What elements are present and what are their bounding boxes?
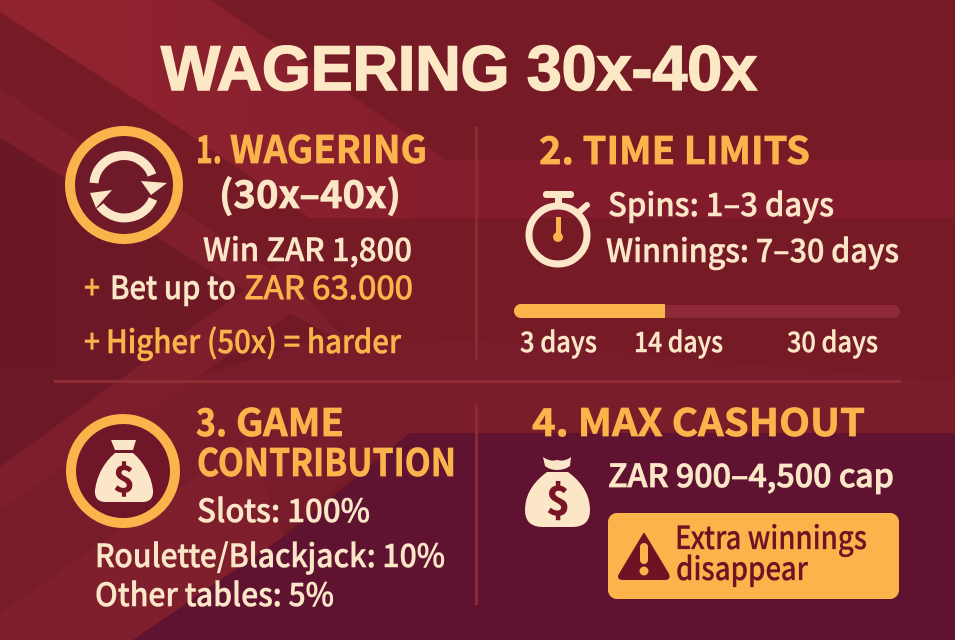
panel: time limits bbox=[514, 120, 900, 361]
divider: horizontal bbox=[54, 380, 901, 383]
text: plus: + bbox=[84, 263, 100, 309]
heading: game: GAME bbox=[236, 392, 344, 447]
icon: money bag circle: $ bbox=[113, 451, 135, 503]
heading: wagering number: 1. bbox=[196, 119, 222, 174]
text: slots: Slots: 100% bbox=[197, 486, 370, 532]
text: disappear: disappear bbox=[676, 544, 809, 590]
label: 14 days: 14 days bbox=[634, 321, 723, 361]
panel: wagering bbox=[70, 119, 427, 363]
panel: game contribution bbox=[71, 392, 456, 616]
text: other tables: Other tables: 5% bbox=[95, 570, 334, 616]
label: 30 days: 30 days bbox=[787, 321, 878, 361]
text: winnings: Winnings: 7–30 days bbox=[606, 226, 899, 272]
panel: max cashout bbox=[525, 392, 899, 599]
text: spins: Spins: 1–3 days bbox=[608, 180, 834, 226]
text: plus: + bbox=[84, 317, 100, 363]
text: higher: Higher (50x) = harder bbox=[106, 317, 402, 363]
divider: vertical top bbox=[475, 127, 478, 360]
progress bar bbox=[514, 304, 900, 318]
heading: wagering: WAGERING bbox=[230, 119, 427, 174]
label: 3 days: 3 days bbox=[520, 321, 597, 361]
icon: warning triangle bbox=[619, 534, 669, 579]
icon: money bag circle bbox=[71, 419, 175, 523]
heading: time limits: 2. TIME LIMITS bbox=[539, 120, 810, 175]
icon: money bag: $ bbox=[546, 469, 570, 527]
icon: stopwatch bbox=[529, 191, 587, 264]
title: WAGERING 30x-40x bbox=[161, 34, 757, 104]
heading: game number: 3. bbox=[196, 392, 227, 447]
text: amount: ZAR 63.000 bbox=[244, 263, 413, 309]
text: win: Win ZAR 1,800 bbox=[203, 225, 412, 271]
heading: multiplier: (30x–40x) bbox=[219, 164, 401, 219]
text: bet up to: Bet up to bbox=[110, 263, 236, 309]
heading: contribution: CONTRIBUTION bbox=[197, 432, 456, 487]
callout: warning bbox=[608, 513, 899, 599]
text: extra winnings: Extra winnings bbox=[675, 513, 867, 559]
divider: vertical bottom bbox=[475, 405, 478, 605]
icon: refresh circle bbox=[70, 131, 178, 239]
text: roulette: Roulette/Blackjack: 10% bbox=[95, 531, 445, 577]
text: cap: ZAR 900–4,500 cap bbox=[608, 451, 894, 497]
icon: money bag bbox=[525, 457, 590, 527]
heading: max cashout: 4. MAX CASHOUT bbox=[532, 392, 865, 447]
